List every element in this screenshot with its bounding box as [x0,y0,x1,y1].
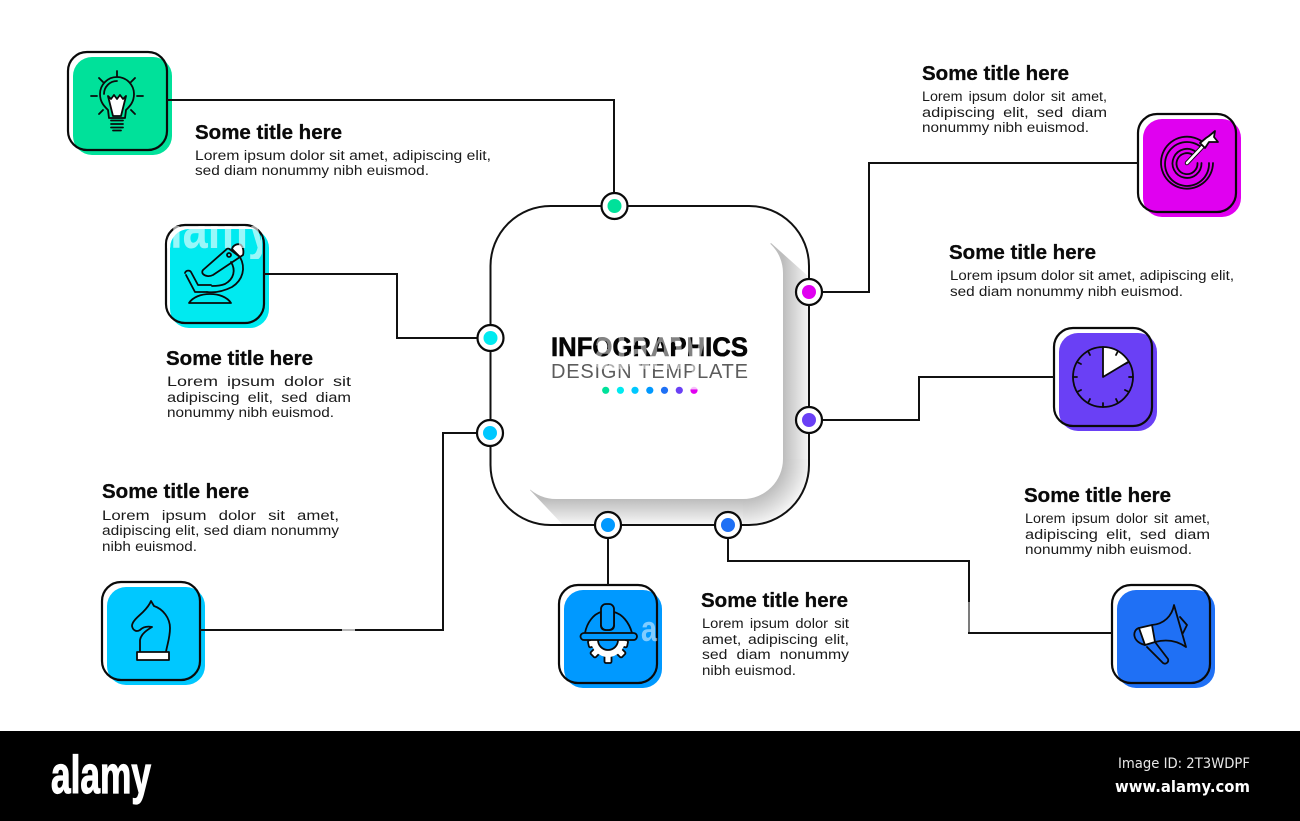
icon tile: helmet with gear [559,585,662,688]
center title: INFOGRAPHICS [551,332,748,362]
node: sky [477,420,503,446]
connector: clock [809,377,1054,420]
text: helmet: nibh euismod. [702,663,796,678]
text: lightbulb: Some title here [195,122,342,144]
text: helmet: amet, adipiscing elit, [702,632,849,647]
text: clock: sed diam nonummy nibh euismod. [950,284,1183,299]
node: magenta [796,279,822,305]
icon tile: megaphone [1112,585,1215,688]
connector: megaphone [728,525,1112,633]
footer url: www.alamy.com [1115,777,1250,796]
text: clock: Some title here [949,242,1096,264]
center title: DESIGN TEMPLATE [551,361,748,383]
text: chess knight: adipiscing elit, sed diam nonummy [102,523,339,538]
text: lightbulb: sed diam nonummy nibh euismod. [195,163,429,178]
node: blue [595,512,621,538]
text: microscope [166,348,351,420]
text: microscope: Lorem ipsum dolor sit [167,374,351,389]
text: helmet: Some title here [701,590,848,612]
panel shadow [530,243,809,525]
footer image id: Image ID: 2T3WDPF [1118,756,1250,772]
connector: target [809,163,1138,292]
footer bar [0,731,1300,821]
inner white card [516,233,783,499]
text: megaphone: adipiscing elit, sed diam [1025,527,1210,542]
text: megaphone: Some title here [1024,485,1171,507]
text: microscope: nonummy nibh euismod. [167,405,334,420]
text: microscope: Some title here [166,348,313,370]
text: chess knight: nibh euismod. [102,539,197,554]
text: clock: Lorem ipsum dolor sit amet, adipiscing elit, [950,268,1234,283]
node: royal blue [715,512,741,538]
connector: lightbulb [167,100,614,206]
connector: microscope [264,274,490,338]
text: clock [949,242,1234,299]
icon tile: microscope: alamy [145,194,273,261]
text: lightbulb [195,122,491,178]
text: target: nonummy nibh euismod. [922,120,1089,135]
text: target: adipiscing elit, sed diam [922,105,1107,120]
outer rounded frame [490,206,809,525]
footer logo: alamy [51,746,151,805]
text: megaphone: Lorem ipsum dolor sit amet, [1025,511,1210,526]
text: chess knight: Some title here [102,481,249,503]
icon tile: target [1138,114,1241,217]
connector: helmet [607,525,609,585]
node: green [602,193,628,219]
icon tile: clock [1054,328,1157,431]
text: megaphone: nonummy nibh euismod. [1025,542,1192,557]
text: helmet: Lorem ipsum dolor sit [702,616,849,631]
text: chess knight [102,481,339,554]
icon tile: lightbulb [68,52,172,155]
text: microscope: adipiscing elit, sed diam [167,390,351,405]
icon tile: microscope [164,224,269,328]
text: lightbulb: Lorem ipsum dolor sit amet, adipiscing elit, [195,148,491,163]
connector: chess knight [200,433,490,630]
text: chess knight: Lorem ipsum dolor sit amet, [102,508,339,523]
central panel [490,206,809,525]
icon tile: chess knight [102,582,205,685]
text: target: Some title here [922,63,1069,85]
text: helmet: sed diam nonummy [702,647,849,662]
icon tile: helmet with gear: a [641,608,658,649]
center title [552,337,748,378]
text: target: Lorem ipsum dolor sit amet, [922,89,1107,104]
center title: alamy [594,314,706,383]
center colour dots [602,386,698,394]
node: cyan [478,325,504,351]
text: target [922,63,1107,135]
text: helmet [701,590,849,678]
text: megaphone [1024,485,1210,557]
node: purple [796,407,822,433]
